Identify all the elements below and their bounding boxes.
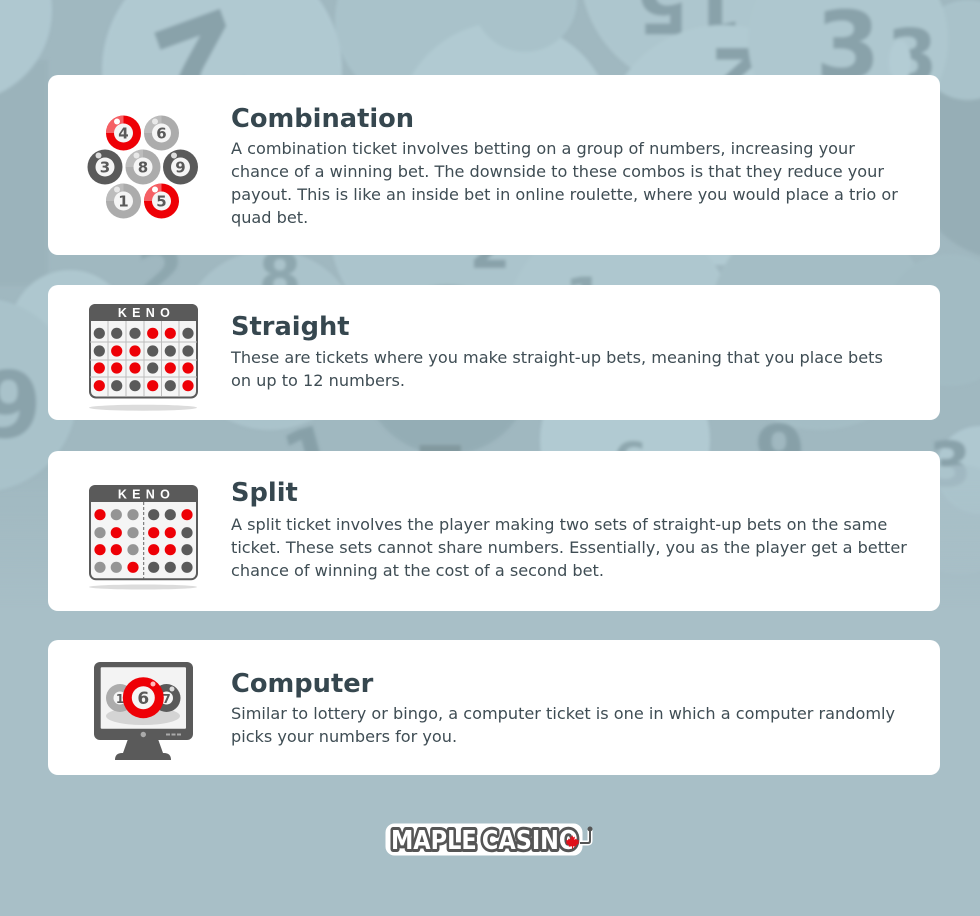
background: faded lottery balls: 3 (886, 14, 938, 100)
icon: group of numbered balls: 4 (118, 124, 129, 142)
heading: Combination: Combination (231, 104, 414, 134)
panel: Straight (48, 285, 940, 420)
text: Straight description (230, 348, 883, 390)
icon: keno split ticket (89, 485, 198, 590)
panel: Combination (48, 75, 940, 255)
background: faded lottery balls: 2 (413, 426, 467, 516)
background: faded lottery balls: 8 (258, 240, 302, 313)
icon: keno straight ticket (89, 304, 198, 411)
text: Split description: A split ticket involves the player making two sets of straight-up bets on the same (231, 515, 887, 534)
background: faded lottery balls: 9 (754, 410, 806, 496)
icon: group of numbered balls: 8 (138, 158, 148, 176)
text: Computer description: Similar to lottery or bingo, a computer ticket is one in which a computer randomly (231, 704, 895, 723)
panel: Computer (48, 640, 940, 775)
text: Combination description: quad bet. (231, 208, 308, 227)
text: Combination description: chance of a winning bet. The downside to these combos is that they reduce your (231, 162, 884, 181)
text: Split description (231, 515, 907, 580)
icon: computer monitor with balls: 1 (116, 692, 124, 706)
background: faded lottery balls: 3 (928, 428, 972, 501)
text: Split description: chance of winning at the cost of a second bet. (231, 561, 604, 580)
text: Straight description: on up to 12 numbers. (231, 371, 405, 390)
icon: group of numbered balls: 1 (118, 192, 129, 210)
icon: keno straight ticket: KENO (118, 306, 175, 320)
text: Computer description (231, 704, 895, 746)
text: Computer description: picks your numbers for you. (231, 727, 457, 746)
text: Straight description: These are tickets where you make straight-up bets, meaning that you place bets (231, 348, 883, 367)
icon: computer monitor with balls (94, 662, 193, 760)
icon: group of numbered balls: 9 (175, 158, 186, 176)
icon: keno split ticket: KENO (118, 488, 175, 502)
icon: group of numbered balls: 3 (100, 158, 110, 176)
icon: group of numbered balls (88, 116, 198, 218)
background: faded lottery balls: 2 (709, 28, 767, 126)
icon: computer monitor with balls: 6 (137, 689, 149, 709)
background: faded lottery balls: 1 (273, 406, 351, 510)
icon: group of numbered balls: 5 (156, 192, 167, 210)
background: faded lottery balls (0, 0, 980, 478)
heading: Straight: Straight (231, 312, 350, 342)
background: faded lottery balls: 1 (564, 265, 606, 335)
background: faded lottery balls: 2 (469, 213, 511, 283)
heading: Split: Split (231, 478, 298, 508)
background: faded lottery balls: 2 (136, 233, 184, 315)
background: faded lottery balls: 6 (613, 432, 647, 490)
text: Combination description (231, 139, 898, 227)
icon: group of numbered balls: 6 (156, 124, 167, 142)
heading: Computer: Computer (231, 669, 373, 699)
text: Combination description: payout. This is like an inside bet in online roulette, where you would place a trio or (231, 185, 898, 204)
text: Split description: ticket. These sets cannot share numbers. Essentially, you as the player get a better (231, 538, 907, 557)
panel: Split (48, 451, 940, 611)
icon: computer monitor with balls: 7 (162, 692, 171, 706)
text: Combination description: A combination ticket involves betting on a group of numbers, increasing your (231, 139, 855, 158)
